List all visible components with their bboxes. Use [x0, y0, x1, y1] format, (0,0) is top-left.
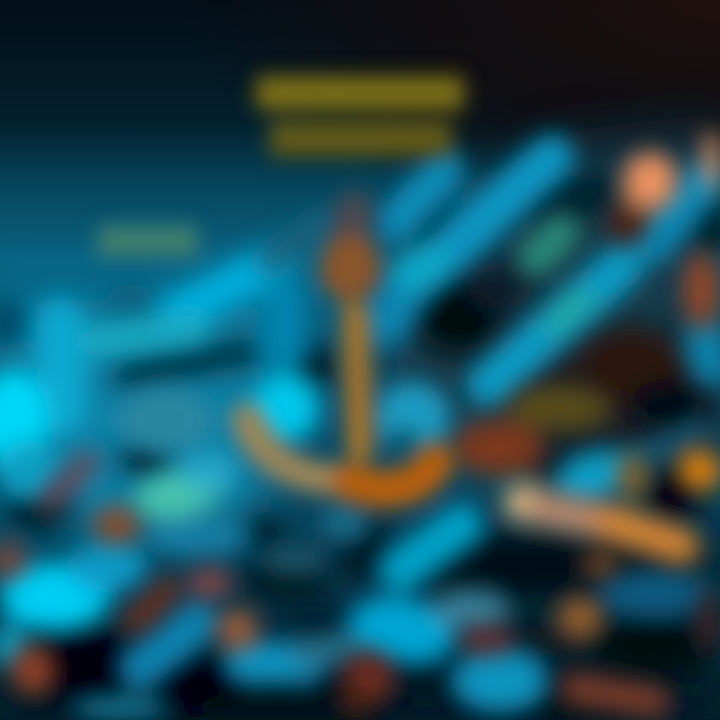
small label — [98, 226, 198, 256]
cyan shapes, bottom — [0, 502, 715, 719]
dark patches — [4, 163, 720, 719]
cyan shapes, left — [0, 222, 635, 556]
title — [256, 76, 464, 156]
title line 2 — [270, 122, 452, 156]
blue diagonal shapes, upper right — [385, 157, 712, 478]
title line 1 — [256, 76, 464, 110]
icon: anchor — [248, 212, 435, 489]
